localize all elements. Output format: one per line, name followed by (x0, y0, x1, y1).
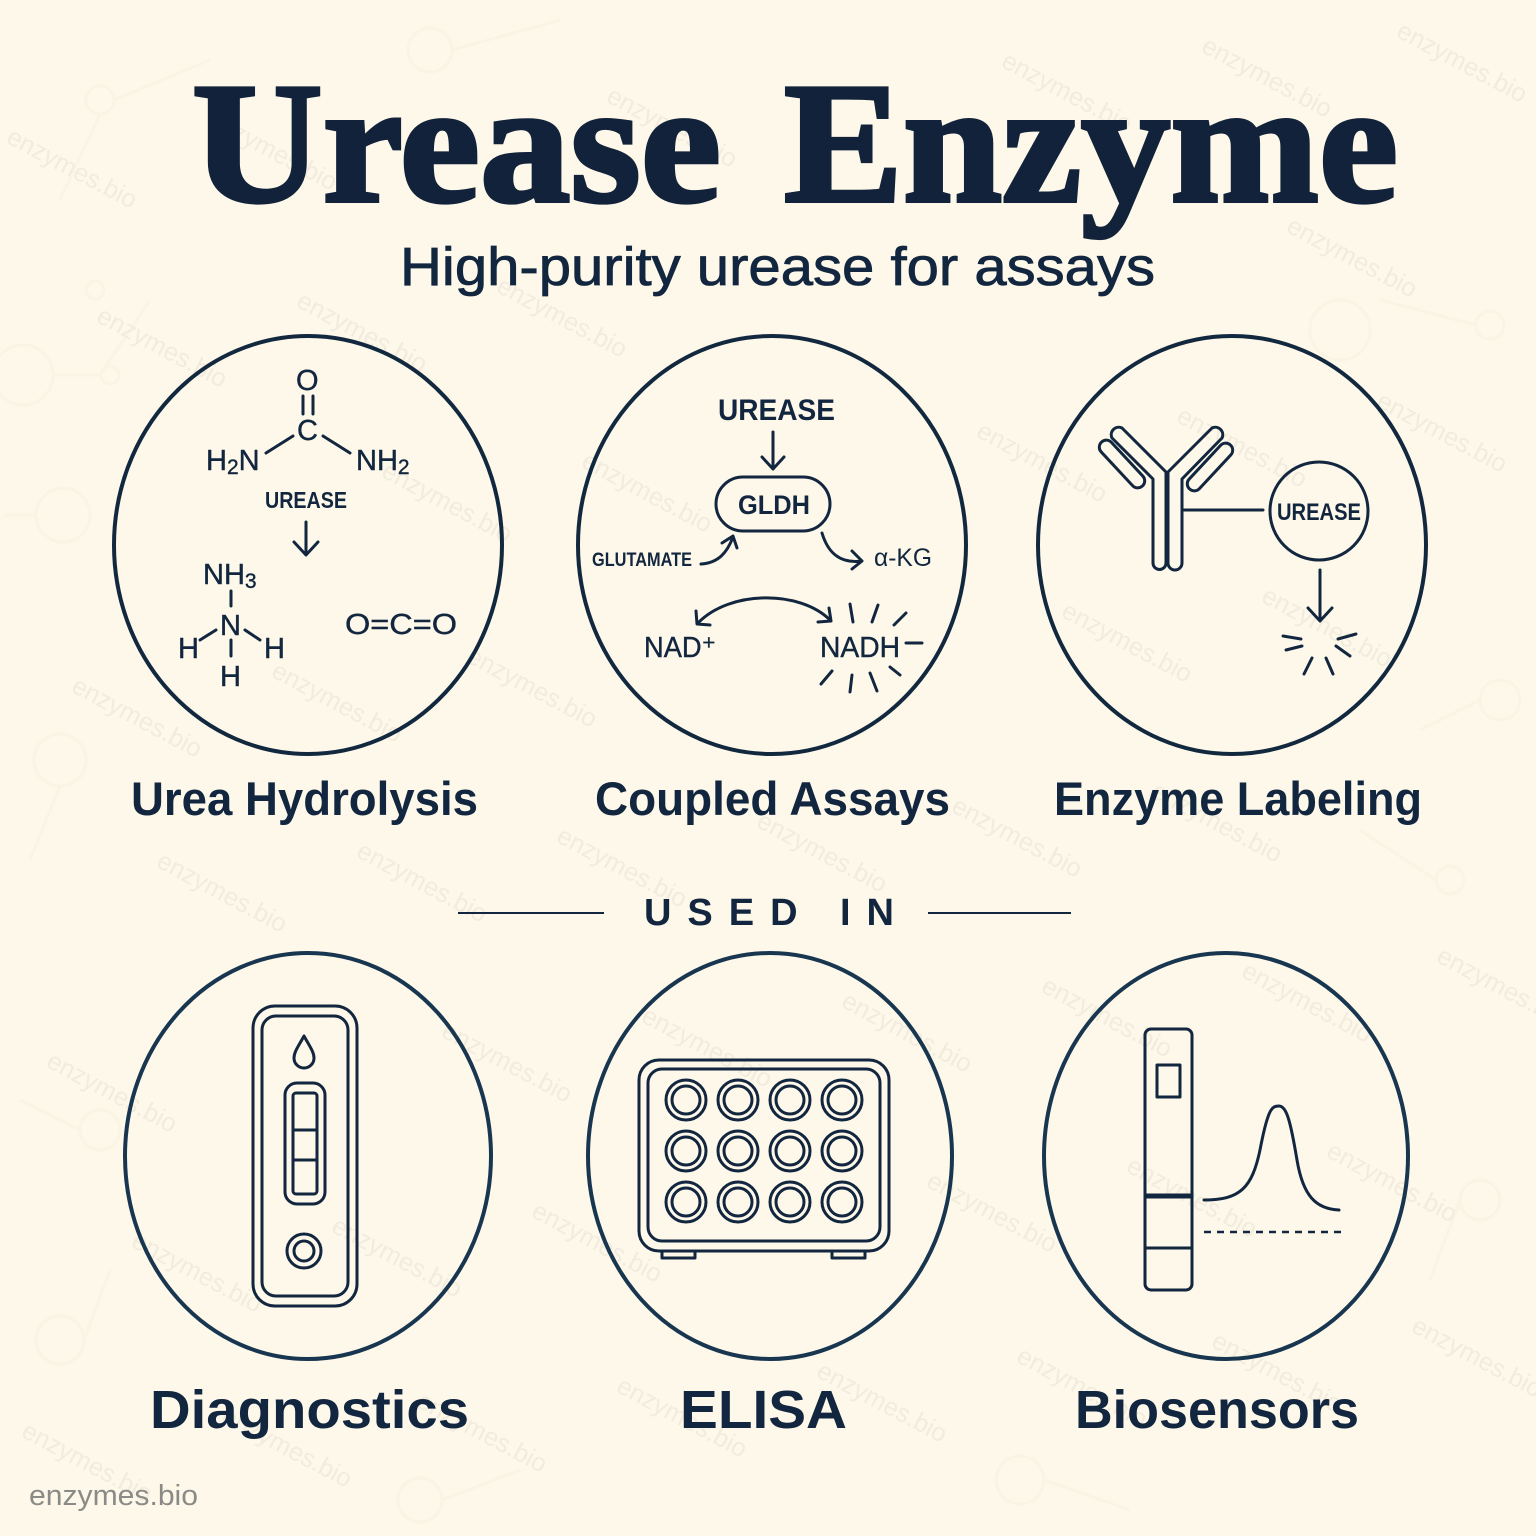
watermark pattern: enzymes.bio (492, 272, 632, 364)
arrow in (701, 536, 737, 564)
watermark pattern: enzymes.bio (1282, 212, 1422, 304)
urease label: UREASE (718, 394, 835, 427)
watermark pattern: enzymes.bio (352, 837, 492, 929)
footer brand: enzymes.bio (29, 1480, 198, 1512)
watermark pattern: enzymes.bio (1057, 597, 1197, 689)
ammonia structure: NH (203, 559, 245, 591)
arrow (294, 522, 318, 555)
NAD+: NAD⁺ (644, 632, 716, 664)
watermark pattern: enzymes.bio (972, 417, 1112, 509)
watermark pattern: enzymes.bio (292, 287, 432, 379)
watermark pattern: enzymes.bio (267, 657, 407, 749)
glow rays (1283, 634, 1356, 674)
ammonia structure: H (220, 661, 241, 693)
antibody icon (1096, 427, 1236, 570)
panel: biosensors (1044, 953, 1408, 1359)
watermark pattern: enzymes.bio (152, 847, 292, 939)
watermark pattern: enzymes.bio (462, 642, 602, 734)
watermark pattern: enzymes.bio (92, 302, 232, 394)
watermark pattern: enzymes.bio (1237, 957, 1377, 1049)
watermark pattern: enzymes.bio (1257, 582, 1397, 674)
watermark pattern: enzymes.bio (437, 1017, 577, 1109)
watermark pattern: enzymes.bio (202, 105, 342, 197)
label: biosensors: Biosensors (1075, 1380, 1359, 1440)
watermark pattern: enzymes.bio (752, 807, 892, 899)
glutamate: GLUTAMATE (592, 550, 692, 571)
ammonia structure: H (264, 633, 285, 665)
arrow (1308, 570, 1332, 621)
subtitle: High-purity urease for assays (400, 237, 1155, 297)
ammonia structure: 3 (245, 570, 257, 593)
watermark pattern: enzymes.bio (1197, 32, 1337, 124)
alpha-KG: α-KG (874, 544, 932, 572)
watermark pattern: enzymes.bio (1147, 777, 1287, 869)
watermark pattern: enzymes.bio (602, 82, 742, 174)
urea structure: C (297, 415, 318, 447)
GLDH box (716, 477, 830, 531)
urease circle: UREASE (1277, 499, 1361, 526)
label: coupled assays: Coupled Assays (595, 772, 950, 825)
watermark pattern: enzymes.bio (1207, 1327, 1347, 1419)
watermark pattern: enzymes.bio (217, 1402, 357, 1494)
title: Urease (192, 49, 721, 239)
sensor peak chart (1204, 1106, 1342, 1232)
title: Enzyme (784, 49, 1398, 239)
watermark pattern: enzymes.bio (922, 1167, 1062, 1259)
NADH: NADH (820, 632, 900, 664)
label: diagnostics: Diagnostics (150, 1380, 469, 1440)
connector (1184, 508, 1263, 512)
arrow (762, 432, 784, 469)
test cassette icon (253, 1006, 357, 1306)
watermark pattern: enzymes.bio (17, 1417, 157, 1509)
urea structure: N (239, 445, 260, 477)
test strip icon (1145, 1029, 1192, 1290)
watermark pattern: enzymes.bio (637, 1002, 777, 1094)
watermark pattern: enzymes.bio (612, 1372, 752, 1464)
urease circle (1270, 462, 1368, 560)
urea structure: 2 (227, 456, 239, 479)
used in heading: USED IN (644, 892, 894, 934)
urea structure (206, 365, 410, 479)
panel: diagnostics (125, 953, 491, 1359)
watermark pattern: enzymes.bio (1172, 402, 1312, 494)
watermark pattern: enzymes.bio (577, 447, 717, 539)
ammonia structure (178, 559, 285, 693)
watermark pattern: enzymes.bio (2, 123, 142, 215)
watermark pattern: enzymes.bio (812, 1357, 952, 1449)
title (192, 49, 1398, 239)
panel: coupled assays (578, 336, 966, 754)
glow rays (821, 604, 922, 692)
watermark pattern: enzymes.bio (327, 1212, 467, 1304)
watermark pattern: enzymes.bio (1037, 972, 1177, 1064)
watermark pattern: enzymes.bio (1372, 387, 1512, 479)
GLDH box: GLDH (738, 490, 810, 520)
watermark pattern: enzymes.bio (997, 47, 1137, 139)
watermark pattern: enzymes.bio (837, 987, 977, 1079)
watermark pattern: enzymes.bio (127, 1227, 267, 1319)
watermark pattern: enzymes.bio (527, 1197, 667, 1289)
urea structure: O (296, 365, 319, 397)
urea structure: 2 (398, 456, 410, 479)
microplate icon (639, 1060, 889, 1258)
watermark pattern: enzymes.bio (412, 1387, 552, 1479)
label: enzyme labeling: Enzyme Labeling (1054, 772, 1422, 825)
ammonia structure: H (178, 633, 199, 665)
panel: enzyme labeling (1038, 336, 1426, 754)
watermark pattern: enzymes.bio (552, 822, 692, 914)
reaction label: UREASE (265, 487, 347, 513)
urea structure: NH (356, 445, 398, 477)
watermark pattern: enzymes.bio (1012, 1342, 1152, 1434)
arrow out (822, 533, 862, 569)
panel: urea hydrolysis (114, 336, 502, 754)
watermark pattern: enzymes.bio (1122, 1152, 1262, 1244)
label: urea hydrolysis: Urea Hydrolysis (131, 772, 478, 825)
watermark pattern: enzymes.bio (947, 792, 1087, 884)
watermark pattern: enzymes.bio (67, 672, 207, 764)
carbon dioxide: O=C=O (345, 609, 457, 641)
watermark pattern: enzymes.bio (1392, 17, 1532, 109)
panel: elisa (588, 953, 952, 1359)
ammonia structure: N (220, 610, 241, 642)
watermark pattern: enzymes.bio (42, 1047, 182, 1139)
arc arrow (696, 598, 831, 625)
label: elisa: ELISA (680, 1380, 847, 1440)
watermark pattern: enzymes.bio (1322, 1137, 1462, 1229)
watermark pattern: enzymes.bio (377, 457, 517, 549)
urea structure: H (206, 445, 227, 477)
